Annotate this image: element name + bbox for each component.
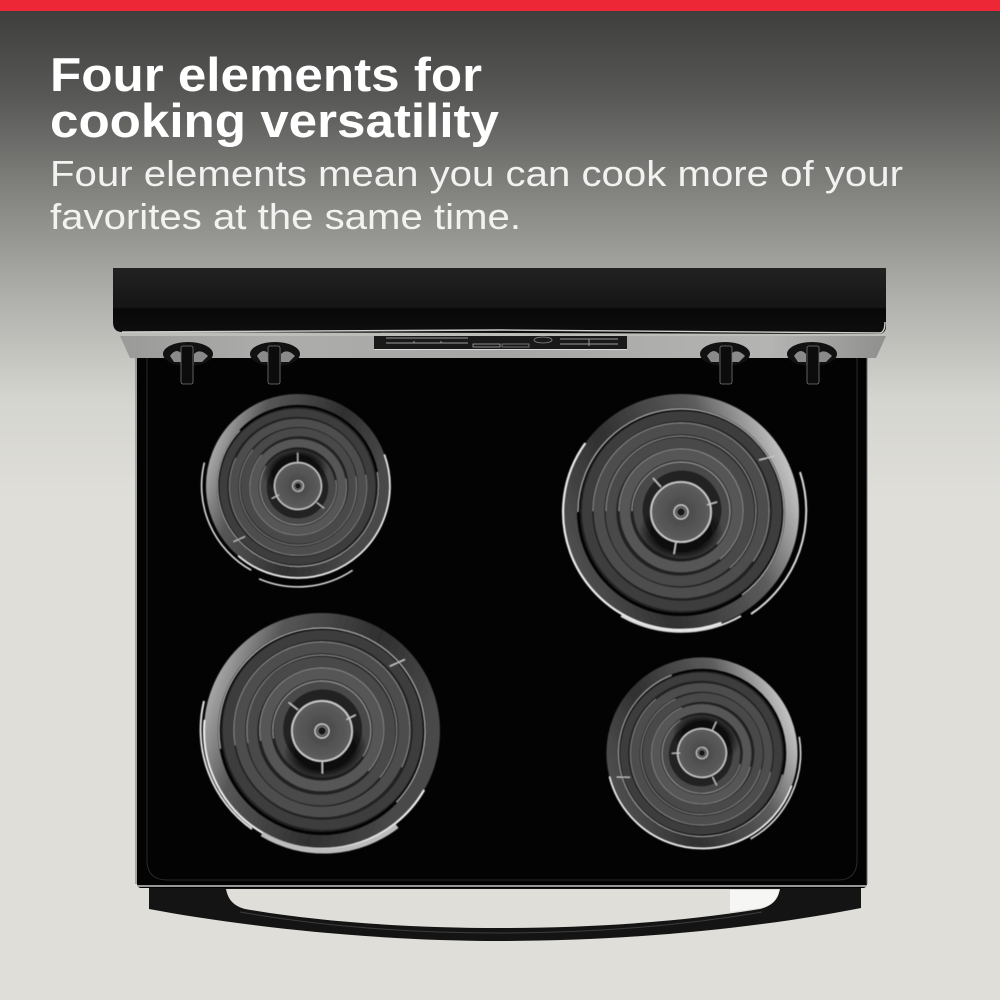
red top bar [0, 0, 1000, 11]
title [50, 48, 499, 147]
back panel [113, 268, 886, 334]
cooktop edge lines [147, 358, 857, 880]
control strip [120, 336, 886, 358]
knob 4 [787, 342, 837, 384]
burner: bottom left [161, 570, 483, 892]
handle [149, 886, 861, 941]
handle reflection [730, 890, 779, 912]
cooktop [137, 355, 867, 888]
burner: top right [530, 361, 832, 663]
knob 1 [163, 342, 213, 384]
title: Four elements for [50, 48, 482, 101]
oven range [113, 268, 886, 941]
control label panel [374, 336, 627, 350]
subtitle: favorites at the same time. [50, 196, 521, 237]
chrome trim [122, 322, 885, 333]
burner: bottom right [579, 630, 825, 876]
subtitle [50, 153, 903, 237]
knob 3 [700, 342, 750, 384]
title: cooking versatility [50, 94, 499, 147]
knob 2 [250, 342, 300, 384]
handle highlight [240, 912, 762, 933]
burner: top left [180, 368, 416, 604]
subtitle: Four elements mean you can cook more of your [50, 153, 903, 194]
